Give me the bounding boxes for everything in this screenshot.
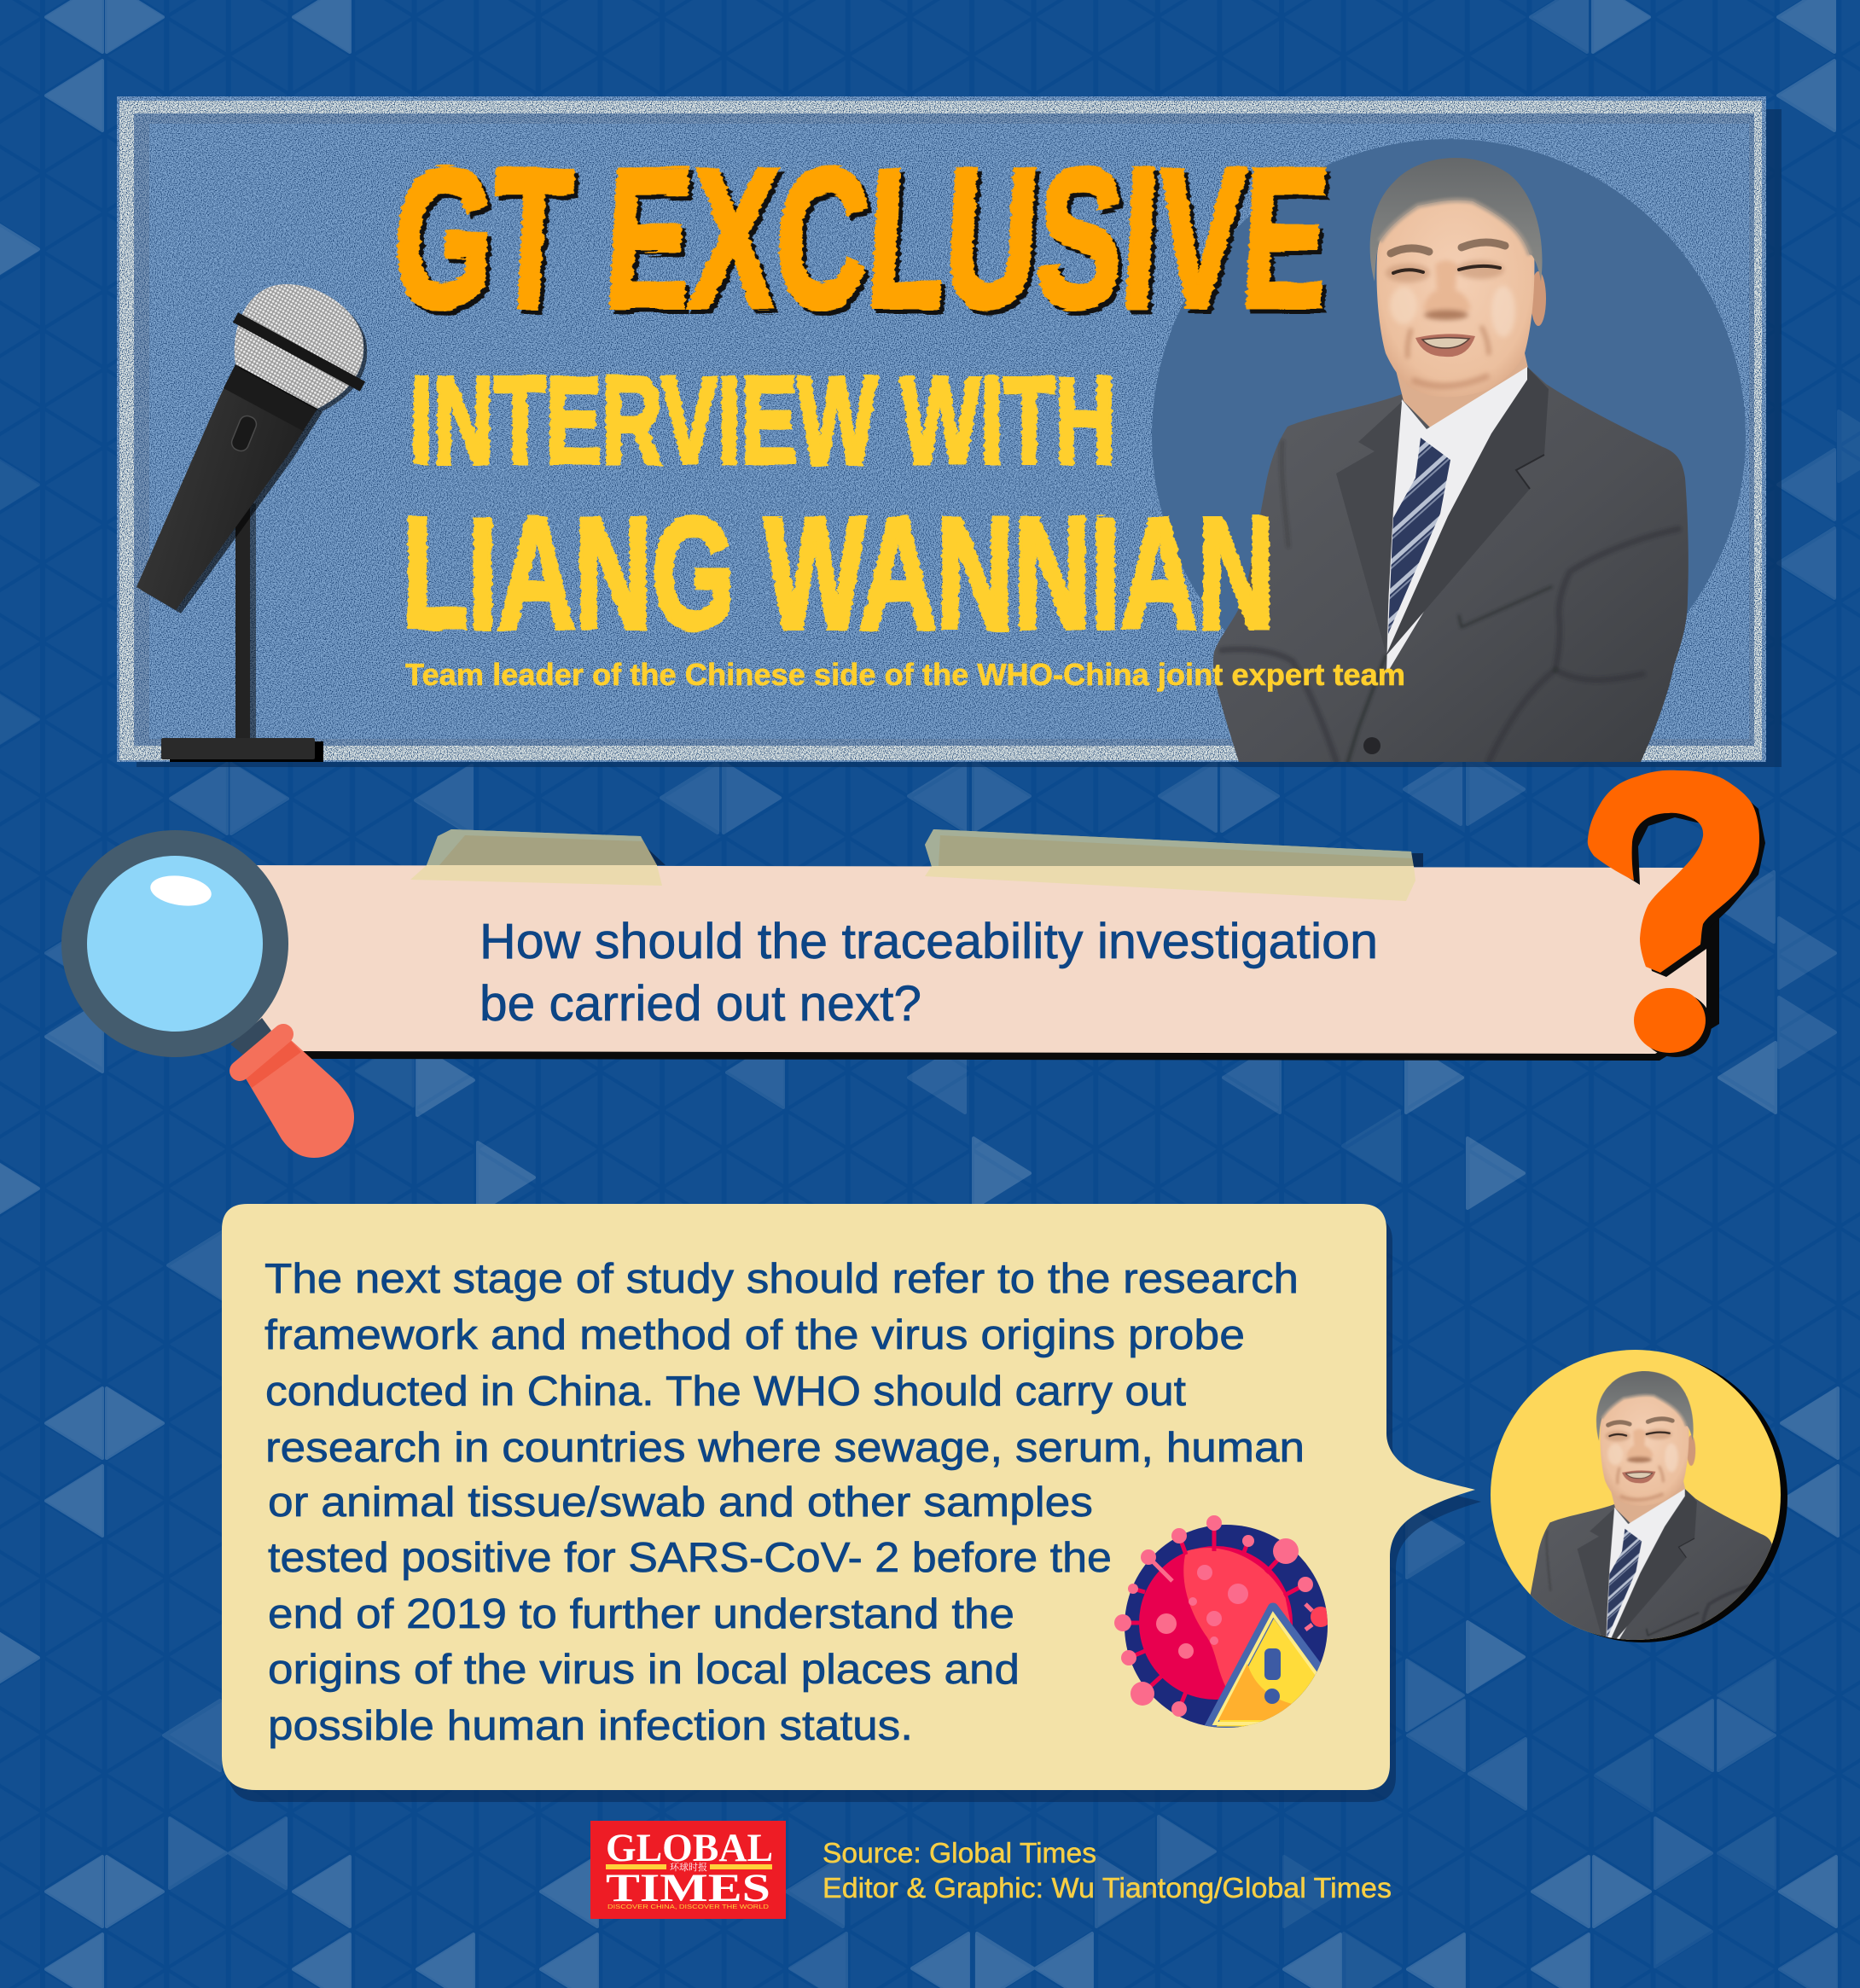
answer text: tested positive for SARS-CoV- 2 before the	[268, 1535, 1112, 1581]
question text: be carried out next?	[480, 976, 921, 1032]
answer text	[264, 1256, 1305, 1749]
heading: INTERVIEW WITH: INTERVIEW WITH	[410, 351, 1116, 490]
paper	[239, 865, 1706, 1054]
paper shadow	[290, 916, 1719, 1061]
tie	[1388, 438, 1450, 634]
heading: LIANG WANNIAN: LIANG WANNIAN	[403, 485, 1275, 662]
panel: header board	[117, 96, 1782, 767]
portrait circle	[1152, 139, 1746, 733]
answer text: end of 2019 to further understand the	[268, 1591, 1014, 1637]
neck	[1391, 346, 1529, 431]
shirt	[1386, 367, 1534, 674]
face	[1376, 181, 1534, 397]
answer text: conducted in China. The WHO should carry out	[265, 1369, 1186, 1415]
lapels	[1336, 402, 1402, 652]
panel: answer speech bubble	[222, 1204, 1481, 1802]
answer text: possible human infection status.	[268, 1703, 913, 1749]
right tape	[925, 829, 1423, 901]
logo: Global Times	[590, 1821, 786, 1919]
logo: Global Times: TIMES	[606, 1866, 770, 1910]
icon: orange question mark	[1588, 770, 1765, 1057]
hair	[1370, 158, 1543, 282]
source and credits: Editor & Graphic: Wu Tiantong/Global Times	[822, 1872, 1392, 1904]
logo: Global Times: GLOBAL	[606, 1826, 773, 1870]
board background with speckled texture	[117, 96, 1766, 762]
face shading	[1386, 260, 1515, 386]
bubble shadow	[228, 1216, 1481, 1802]
left tape	[410, 829, 666, 886]
subtitle: Team leader of the Chinese side of the WHO-China joint expert team	[405, 657, 1405, 692]
question text: How should the traceability investigation	[480, 914, 1378, 969]
answer text: The next stage of study should refer to the research	[264, 1256, 1299, 1302]
suit jacket	[1213, 367, 1689, 762]
answer text: framework and method of the virus origins probe	[264, 1312, 1245, 1358]
eyebrows and eyes	[1391, 242, 1505, 273]
speaker portrait circle	[1491, 1350, 1787, 1642]
icon: microphone on stand	[137, 284, 367, 762]
icon: virus with warning sign	[1114, 1515, 1328, 1728]
title: GT EXCLUSIVE: GT EXCLUSIVE	[388, 128, 1334, 349]
question text	[480, 914, 1378, 1032]
mouth	[1415, 334, 1475, 357]
bubble	[222, 1204, 1475, 1790]
logo: Global Times: 环球时报	[670, 1861, 707, 1873]
source and credits	[822, 1837, 1392, 1904]
source and credits: Source: Global Times	[822, 1837, 1096, 1869]
logo: Global Times: DISCOVER CHINA, DISCOVER THE WORLD	[607, 1904, 769, 1910]
jacket button	[1363, 737, 1380, 754]
icon: magnifying glass	[61, 830, 354, 1158]
panel: question paper strip	[239, 829, 1719, 1061]
ear	[1531, 271, 1546, 326]
portrait: Liang Wannian	[1213, 158, 1689, 764]
panel shadow	[137, 109, 1782, 767]
suit shading	[1222, 442, 1678, 764]
answer text: research in countries where sewage, serum, human	[265, 1425, 1305, 1471]
answer text: origins of the virus in local places and	[268, 1647, 1020, 1693]
answer text: or animal tissue/swab and other samples	[268, 1479, 1093, 1526]
